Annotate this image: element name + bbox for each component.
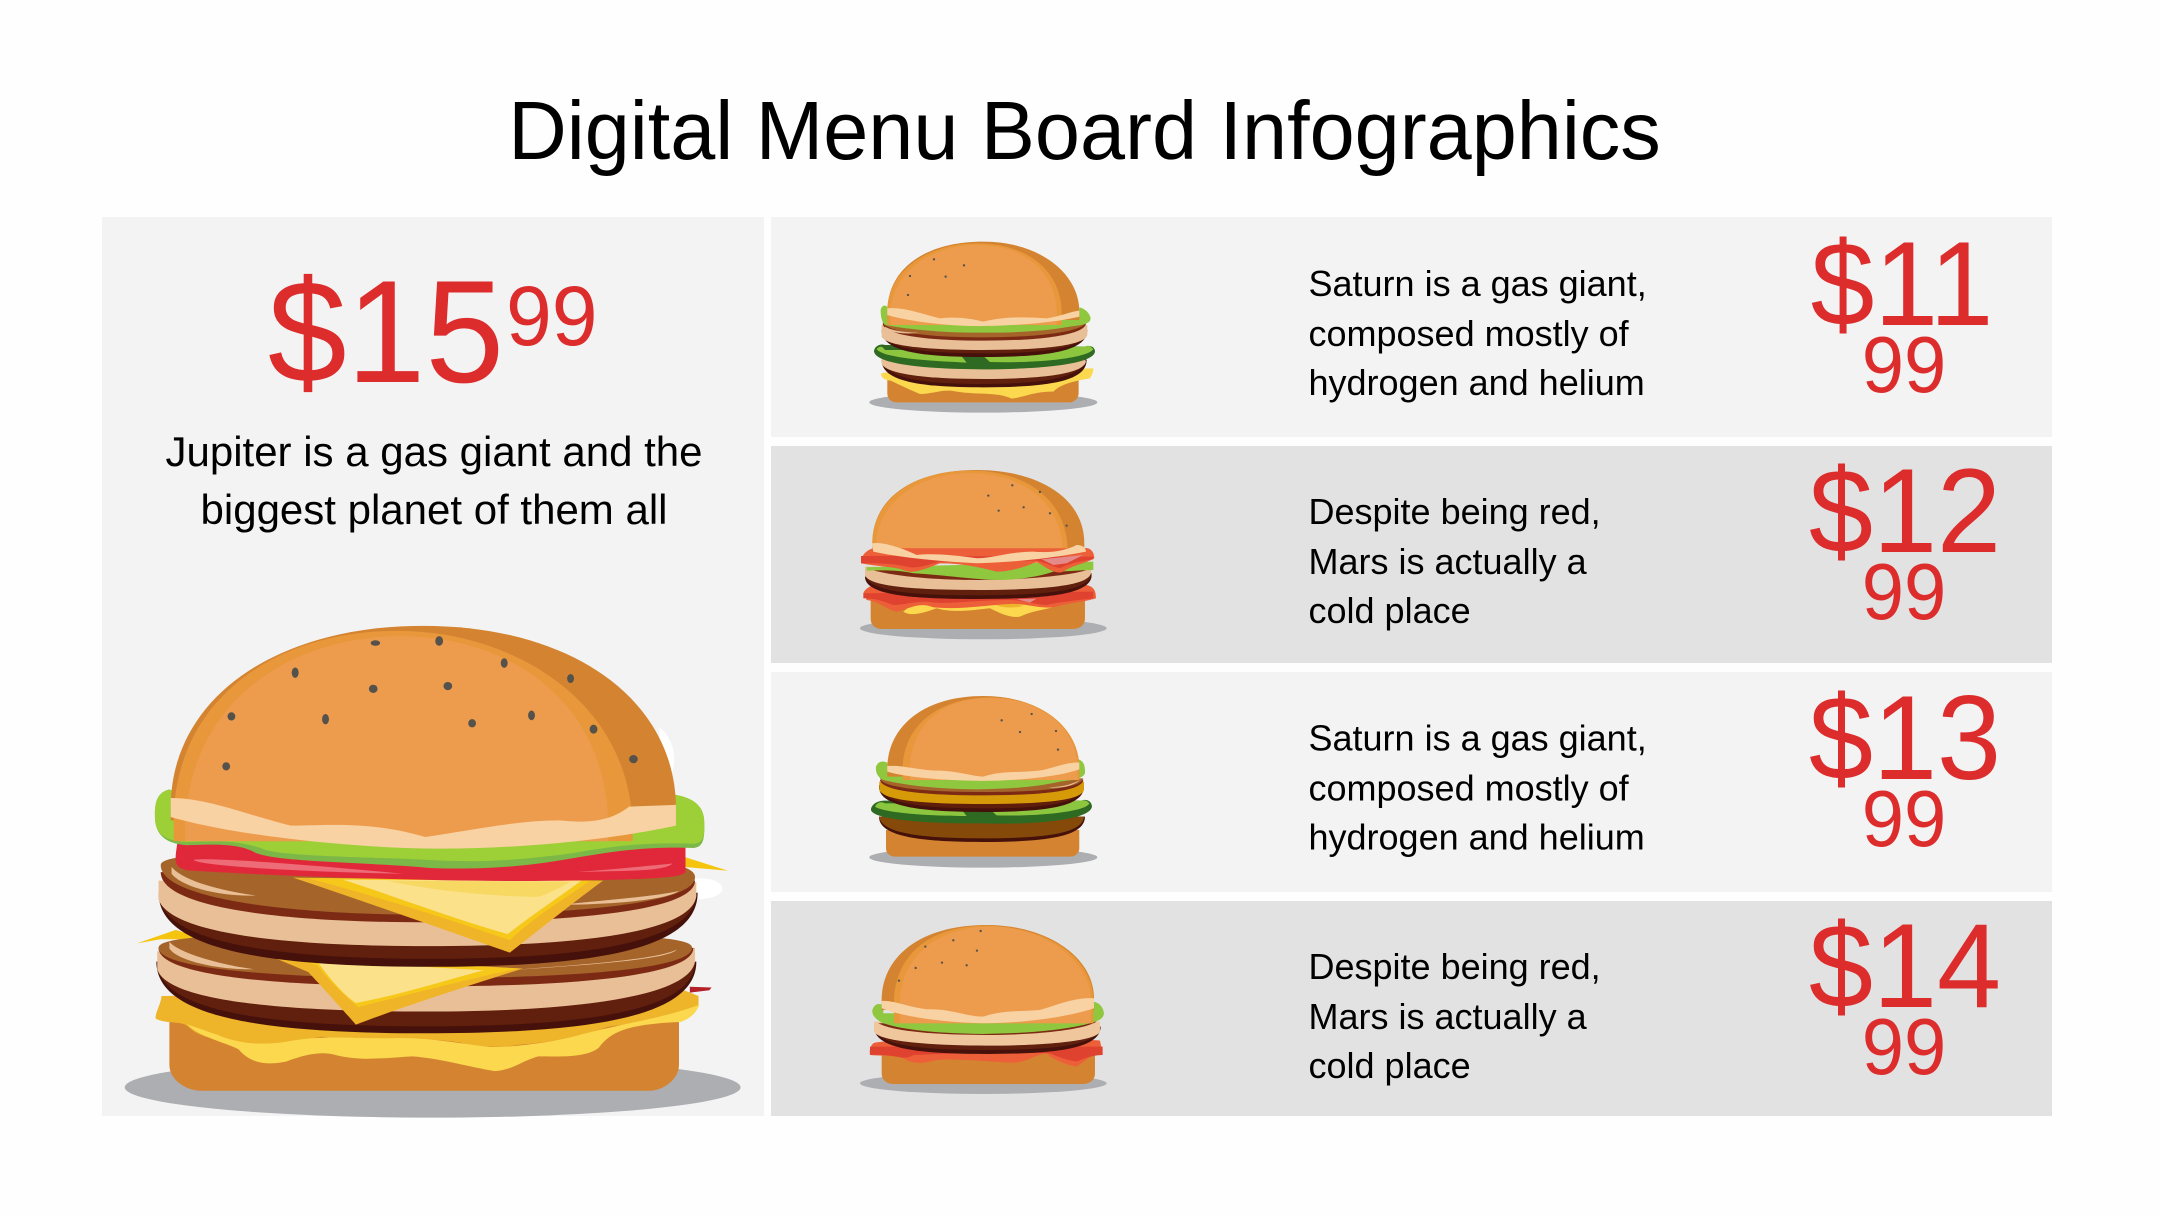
lower patty (156, 962, 696, 1033)
row 1 price (1811, 217, 1993, 409)
sesame seeds (222, 636, 638, 770)
featured description: biggest planet of them all (201, 486, 667, 533)
row 1 description: composed mostly of (1308, 313, 1630, 354)
row 4 description: Despite being red, (1308, 946, 1601, 987)
lettuce (155, 789, 704, 869)
row 3 price (1809, 671, 2001, 863)
row 2 price: 99 (1862, 546, 1946, 636)
row 3 description: Saturn is a gas giant, (1308, 718, 1647, 758)
row 2 price (1809, 444, 2001, 636)
panel: row 2 (771, 444, 2052, 663)
icon: burger 4 with bacon (860, 925, 1107, 1094)
featured description (165, 428, 703, 533)
row 3 price: 99 (1862, 773, 1946, 863)
panel: row 3 (771, 671, 2052, 892)
featured description: Jupiter is a gas giant and the (165, 428, 703, 475)
title: Digital Menu Board Infographics (508, 85, 1661, 177)
row 3 price: $13 (1809, 671, 2001, 805)
row 3 description: hydrogen and helium (1308, 816, 1645, 858)
panel: row 1 (771, 217, 2052, 437)
row 1 description (1308, 263, 1647, 403)
row 3 description: composed mostly of (1308, 768, 1630, 808)
row 1 price: 99 (1862, 319, 1946, 409)
row 4 description: Mars is actually a (1308, 996, 1588, 1037)
row 3 description (1308, 718, 1647, 858)
row 4 price: 99 (1862, 1001, 1946, 1091)
row 2 description (1308, 491, 1601, 631)
row 1 price: $11 (1811, 217, 1993, 351)
row 4 description: cold place (1308, 1045, 1471, 1086)
row 1 description: Saturn is a gas giant, (1308, 263, 1647, 304)
featured price: 99 (506, 269, 598, 363)
row 4 price (1809, 899, 2001, 1091)
upper patty (159, 893, 698, 967)
lower cheese (267, 955, 523, 1025)
row 1 description: hydrogen and helium (1308, 362, 1645, 403)
panel: featured burger (102, 217, 764, 1118)
row 2 price: $12 (1809, 444, 2001, 578)
panel: row 4 (771, 899, 2052, 1116)
icon: burger 3 with cucumber and cheese (869, 696, 1097, 868)
row 2 description: Despite being red, (1308, 491, 1601, 532)
row 2 description: Mars is actually a (1308, 541, 1588, 582)
featured price: $15 (268, 251, 504, 413)
top bun (171, 626, 676, 824)
row 2 description: cold place (1308, 590, 1471, 631)
icon: large burger (125, 626, 741, 1118)
row 4 price: $14 (1809, 899, 2001, 1033)
icon: burger 2 with bacon (860, 470, 1107, 639)
row 4 description (1308, 946, 1601, 1086)
icon: burger 1 with cucumber (869, 242, 1097, 413)
upper cheese (293, 878, 603, 953)
tomato (176, 844, 685, 881)
